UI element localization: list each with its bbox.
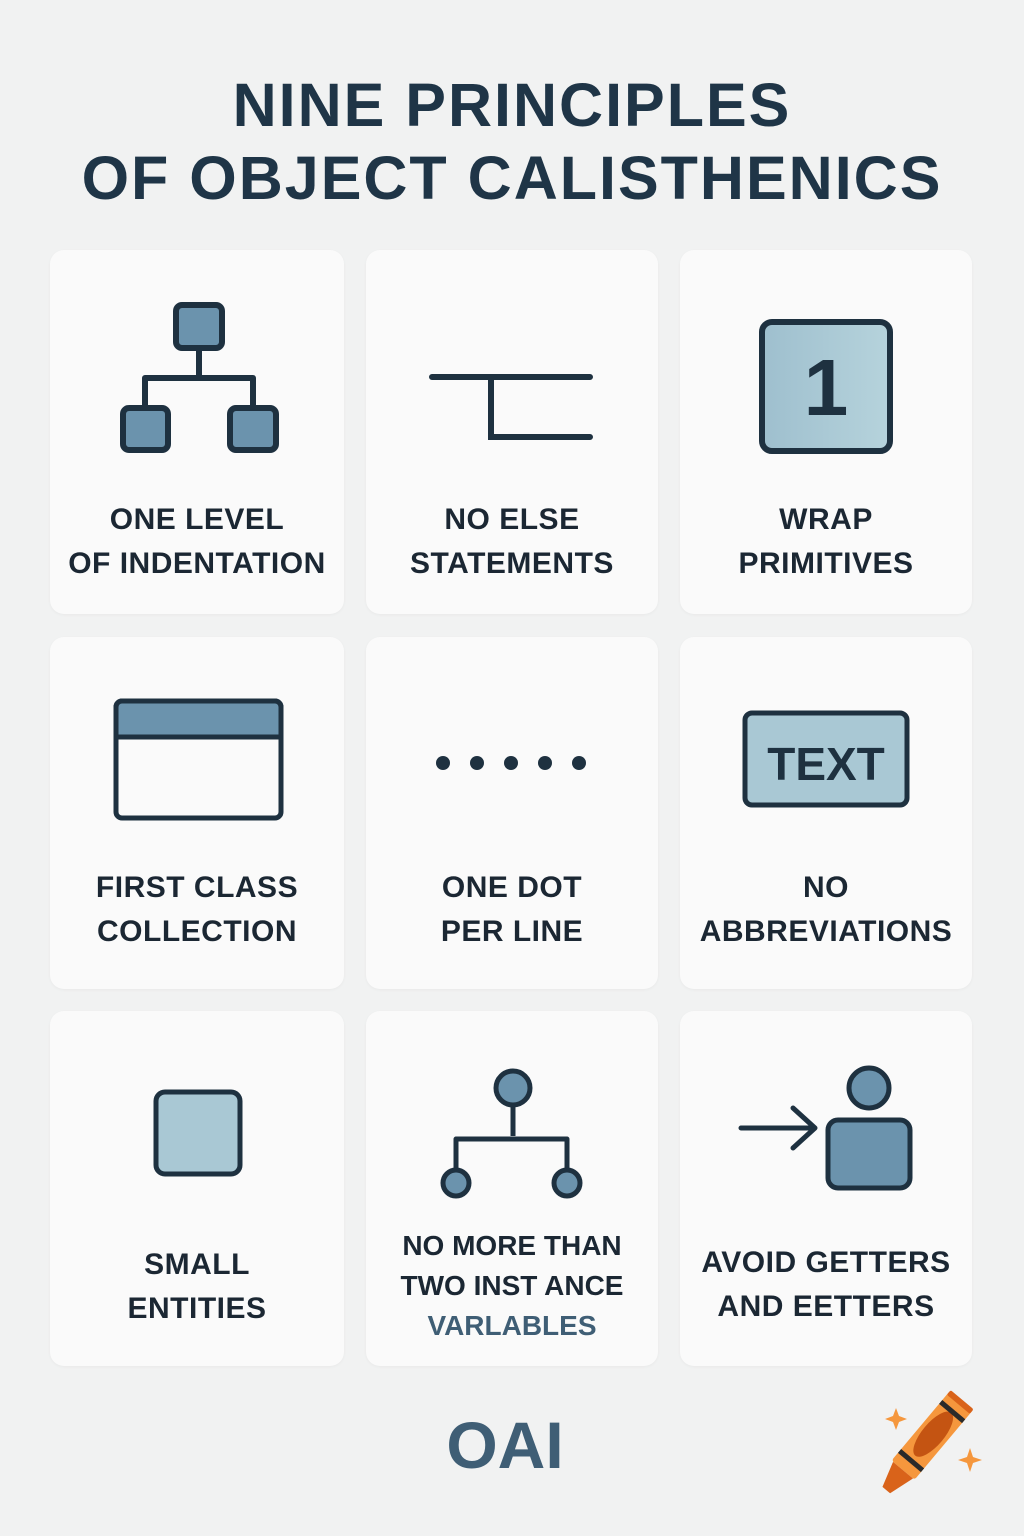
title: OF OBJECT CALISTHENICS xyxy=(82,144,942,212)
icon: arrow to person xyxy=(738,1066,912,1190)
label: ENTITIES xyxy=(127,1292,266,1325)
icon: window xyxy=(114,698,284,820)
label: AVOID GETTERS xyxy=(701,1246,951,1279)
panel: one level of indentation xyxy=(50,250,344,614)
label: TWO INST ANCE xyxy=(401,1270,623,1301)
icon: small square xyxy=(154,1090,242,1176)
label: FIRST CLASS xyxy=(96,871,298,904)
label xyxy=(701,1246,951,1323)
label: NO MORE THAN xyxy=(402,1230,622,1261)
panel: first class collection xyxy=(50,637,344,989)
icon: number box xyxy=(759,319,893,454)
label: ONE LEVEL xyxy=(110,503,284,536)
label: STATEMENTS xyxy=(410,547,614,580)
icon: text box: TEXT xyxy=(767,738,885,790)
panel: small entities xyxy=(50,1011,344,1366)
label xyxy=(700,871,952,948)
icon: hierarchy xyxy=(120,302,279,453)
label: ONE DOT xyxy=(442,871,582,904)
label: OF INDENTATION xyxy=(68,547,326,580)
icon: tree nodes xyxy=(440,1068,582,1198)
icon: crayon xyxy=(882,1390,982,1494)
panel: no more than two instance variables xyxy=(366,1011,658,1366)
panel: no else statements xyxy=(366,250,658,614)
label: VARLABLES xyxy=(427,1310,597,1341)
panel: no abbreviations xyxy=(680,637,972,989)
panel: avoid getters and setters xyxy=(680,1011,972,1366)
label xyxy=(127,1248,266,1325)
label: NO ELSE xyxy=(444,503,580,536)
icon: branch line xyxy=(429,374,593,440)
label xyxy=(96,871,298,948)
title: NINE PRINCIPLES xyxy=(233,71,791,139)
icon: dots xyxy=(436,756,586,770)
label xyxy=(68,503,326,580)
label xyxy=(738,503,914,580)
icon: text box xyxy=(742,710,910,808)
title xyxy=(82,71,942,212)
label xyxy=(410,503,614,580)
label: ABBREVIATIONS xyxy=(700,915,952,948)
label xyxy=(441,871,583,948)
label: PRIMITIVES xyxy=(738,547,914,580)
label: AND EETTERS xyxy=(717,1290,935,1323)
label: COLLECTION xyxy=(97,915,297,948)
label: PER LINE xyxy=(441,915,583,948)
label: WRAP xyxy=(779,503,873,536)
panel: wrap primitives xyxy=(680,250,972,614)
label: NO xyxy=(803,871,849,904)
footer logo: OAI xyxy=(446,1408,564,1482)
panel: one dot per line xyxy=(366,637,658,989)
icon: number box: 1 xyxy=(804,343,848,432)
label xyxy=(400,1230,623,1341)
label: SMALL xyxy=(144,1248,250,1281)
